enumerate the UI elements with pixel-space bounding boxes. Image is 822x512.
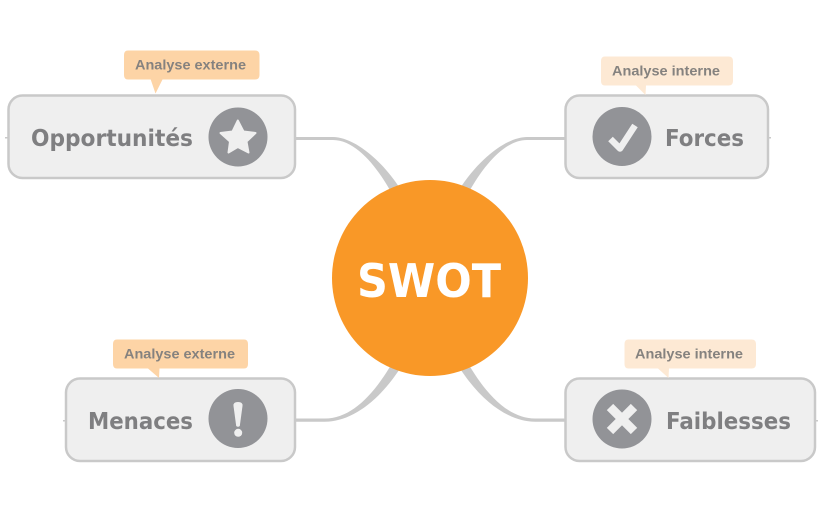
- icon: cross: [592, 390, 652, 448]
- callout: Analyse interne (Faiblesses): Analyse interne: [635, 346, 743, 362]
- callout: Analyse externe (Opportunités): [124, 50, 260, 94]
- icon: exclamation mark: [208, 389, 268, 448]
- connector: Faiblesses to centre: [459, 365, 565, 422]
- callout: Analyse externe (Opportunités): Analyse externe: [135, 56, 246, 72]
- callout: Analyse externe (Menaces): [113, 340, 248, 378]
- panel: Menaces: [63, 378, 295, 461]
- connector: Forces to centre: [459, 137, 565, 192]
- heading: Menaces: Menaces: [88, 409, 193, 435]
- heading: Faiblesses: Faiblesses: [666, 409, 791, 435]
- panel: Forces: [566, 96, 771, 178]
- centre circle: SWOT: SWOT: [357, 254, 502, 308]
- callout: Analyse interne (Faiblesses): [624, 340, 756, 378]
- connector: Menaces to centre: [295, 365, 401, 422]
- icon: check mark: [592, 107, 652, 166]
- heading: Forces: Forces: [665, 126, 744, 152]
- connector: Opportunités to centre: [295, 137, 401, 192]
- icon: star: [208, 108, 268, 166]
- callout: Analyse externe (Menaces): Analyse externe: [124, 346, 235, 362]
- callout: Analyse interne (Forces): [601, 56, 733, 95]
- panel: Opportunités: [5, 96, 295, 178]
- panel: Faiblesses: [566, 378, 818, 461]
- heading: Opportunités: Opportunités: [31, 126, 193, 152]
- callout: Analyse interne (Forces): Analyse interne: [612, 62, 720, 78]
- centre circle: SWOT: [332, 180, 528, 376]
